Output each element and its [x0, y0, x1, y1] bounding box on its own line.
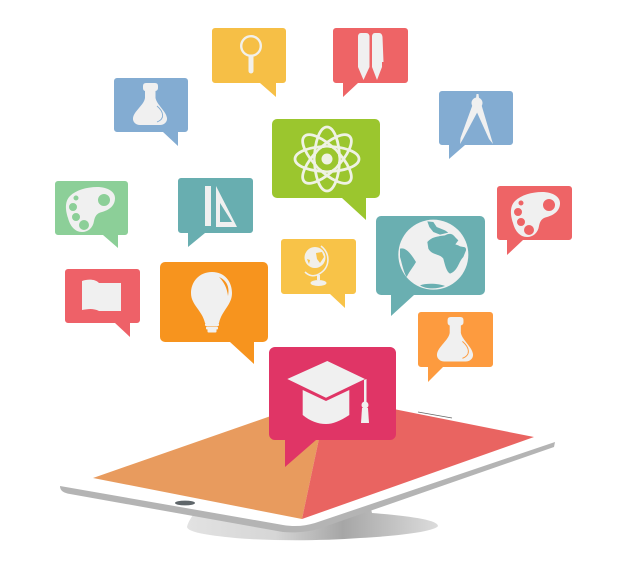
icon: desk globe — [304, 246, 328, 286]
bubble shape — [281, 239, 356, 308]
tablet body — [60, 392, 555, 528]
bubble shape — [269, 347, 396, 467]
bubble shape — [418, 312, 493, 382]
bubble shape — [160, 262, 268, 364]
icon: pens — [358, 33, 384, 80]
bubble: desk globe — [281, 239, 356, 308]
bubble: set squares — [178, 178, 253, 247]
bubble: light bulb — [160, 262, 268, 364]
bubble shape — [212, 28, 286, 97]
bubble shape — [376, 216, 485, 316]
bubble shape — [497, 186, 572, 255]
icon: set squares — [205, 186, 237, 227]
tablet screen: orange half — [93, 396, 328, 519]
tablet shadow — [187, 505, 438, 540]
icon: compass — [460, 94, 493, 144]
bubble: palette green — [55, 181, 128, 248]
bubble shape — [439, 91, 513, 159]
bubble shape — [55, 181, 128, 248]
bubble: pens — [333, 28, 408, 97]
icon: earth — [398, 220, 468, 290]
icon: atom — [295, 127, 359, 191]
icon: graduation cap — [287, 361, 369, 424]
icon: flask — [437, 317, 473, 362]
icon: palette — [66, 187, 115, 232]
bubble: earth globe — [376, 216, 485, 316]
bubble shape — [178, 178, 253, 247]
bubble shape — [333, 28, 408, 97]
icon: light bulb — [191, 272, 232, 332]
tablet — [60, 392, 555, 540]
bubble: book — [65, 269, 140, 337]
bubble: palette red — [497, 186, 572, 255]
bubble: compass — [439, 91, 513, 159]
icon: palette — [511, 192, 560, 237]
bubble: graduation cap — [269, 347, 396, 467]
bubble: magnifier — [212, 28, 286, 97]
tablet speaker slit — [418, 412, 452, 418]
icon: magnifier — [241, 36, 261, 71]
icon: flask — [133, 83, 167, 125]
bubble shape — [114, 78, 188, 146]
tablet home button — [175, 501, 195, 505]
icon: book — [82, 280, 121, 311]
bubble: flask orange — [418, 312, 493, 382]
tablet screen: red half — [302, 396, 534, 519]
bubble shape — [65, 269, 140, 337]
bubble: atom — [272, 119, 380, 220]
bubble: flask blue — [114, 78, 188, 146]
bubble shape — [272, 119, 380, 220]
tablet edge — [60, 442, 555, 532]
